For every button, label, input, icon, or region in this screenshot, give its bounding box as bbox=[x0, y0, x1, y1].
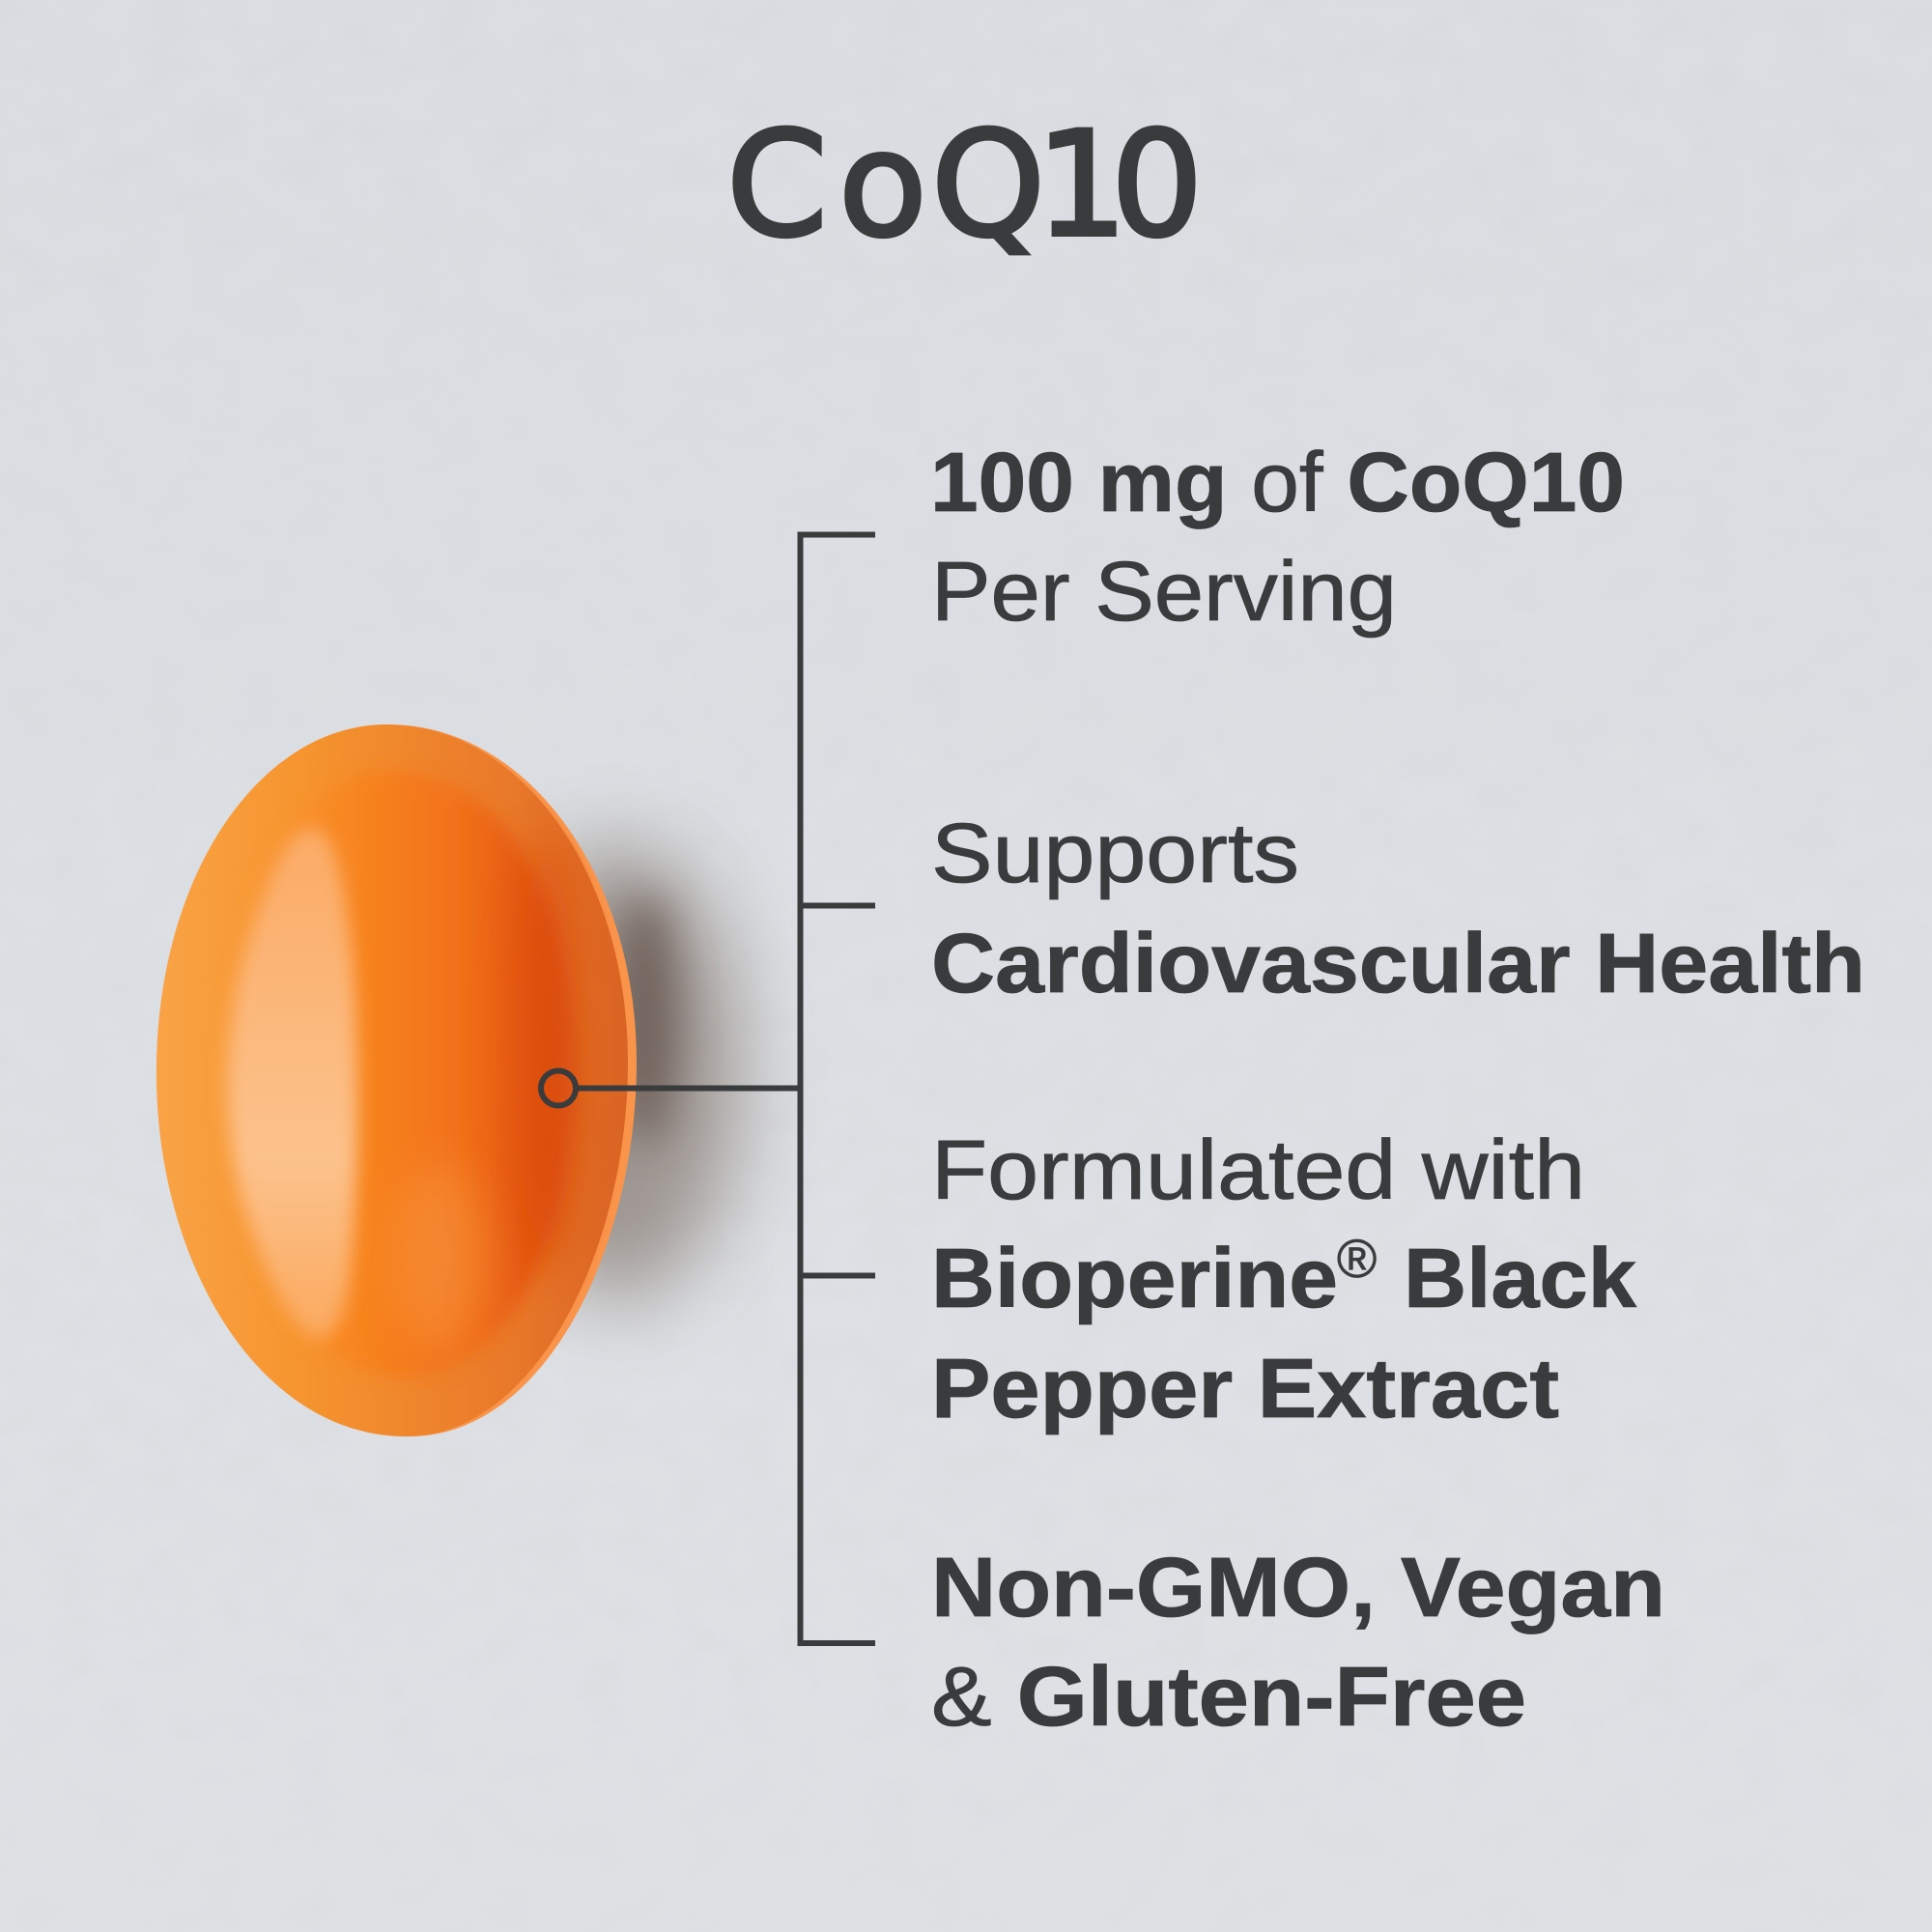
text block: non-GMO, vegan and gluten-free: Non-GMO, Vegan bbox=[931, 1541, 1665, 1634]
title: CoQ10 bbox=[726, 101, 1203, 270]
capsule dome bbox=[313, 769, 577, 1378]
text block: non-GMO, vegan and gluten-free: & Gluten-Free bbox=[931, 1650, 1526, 1744]
text block: Bioperine black pepper extract: Black bbox=[1404, 1232, 1637, 1325]
text block: Bioperine black pepper extract: Bioperine bbox=[931, 1232, 1338, 1325]
text block: Bioperine black pepper extract: Pepper Extract bbox=[931, 1342, 1559, 1435]
text block: 100 mg of CoQ10 per serving: Per Serving bbox=[931, 545, 1397, 639]
glossy highlight bbox=[228, 828, 357, 1339]
text block: Bioperine black pepper extract bbox=[931, 1123, 1637, 1435]
text block: supports cardiovascular health: Supports bbox=[931, 807, 1299, 900]
connector: bracket and pointer bbox=[541, 535, 875, 1643]
text block: Bioperine black pepper extract: Formulated with bbox=[931, 1123, 1585, 1217]
text block: 100 mg of CoQ10 per serving bbox=[930, 436, 1625, 639]
lower reflection bbox=[393, 1164, 486, 1348]
capsule shadow bbox=[497, 845, 739, 1299]
text block: supports cardiovascular health: Cardiovascular Health bbox=[931, 917, 1865, 1010]
text block: supports cardiovascular health bbox=[931, 807, 1865, 1010]
icon: orange softgel capsule bbox=[156, 724, 637, 1436]
text block: Bioperine black pepper extract: ® bbox=[1337, 1228, 1377, 1289]
text block: 100 mg of CoQ10 per serving: 100 mg of CoQ10 bbox=[930, 436, 1625, 529]
capsule rim bbox=[156, 724, 637, 1436]
dark band bbox=[517, 836, 575, 1270]
capsule body bbox=[156, 724, 628, 1436]
text block: non-GMO, vegan and gluten-free bbox=[931, 1541, 1665, 1744]
